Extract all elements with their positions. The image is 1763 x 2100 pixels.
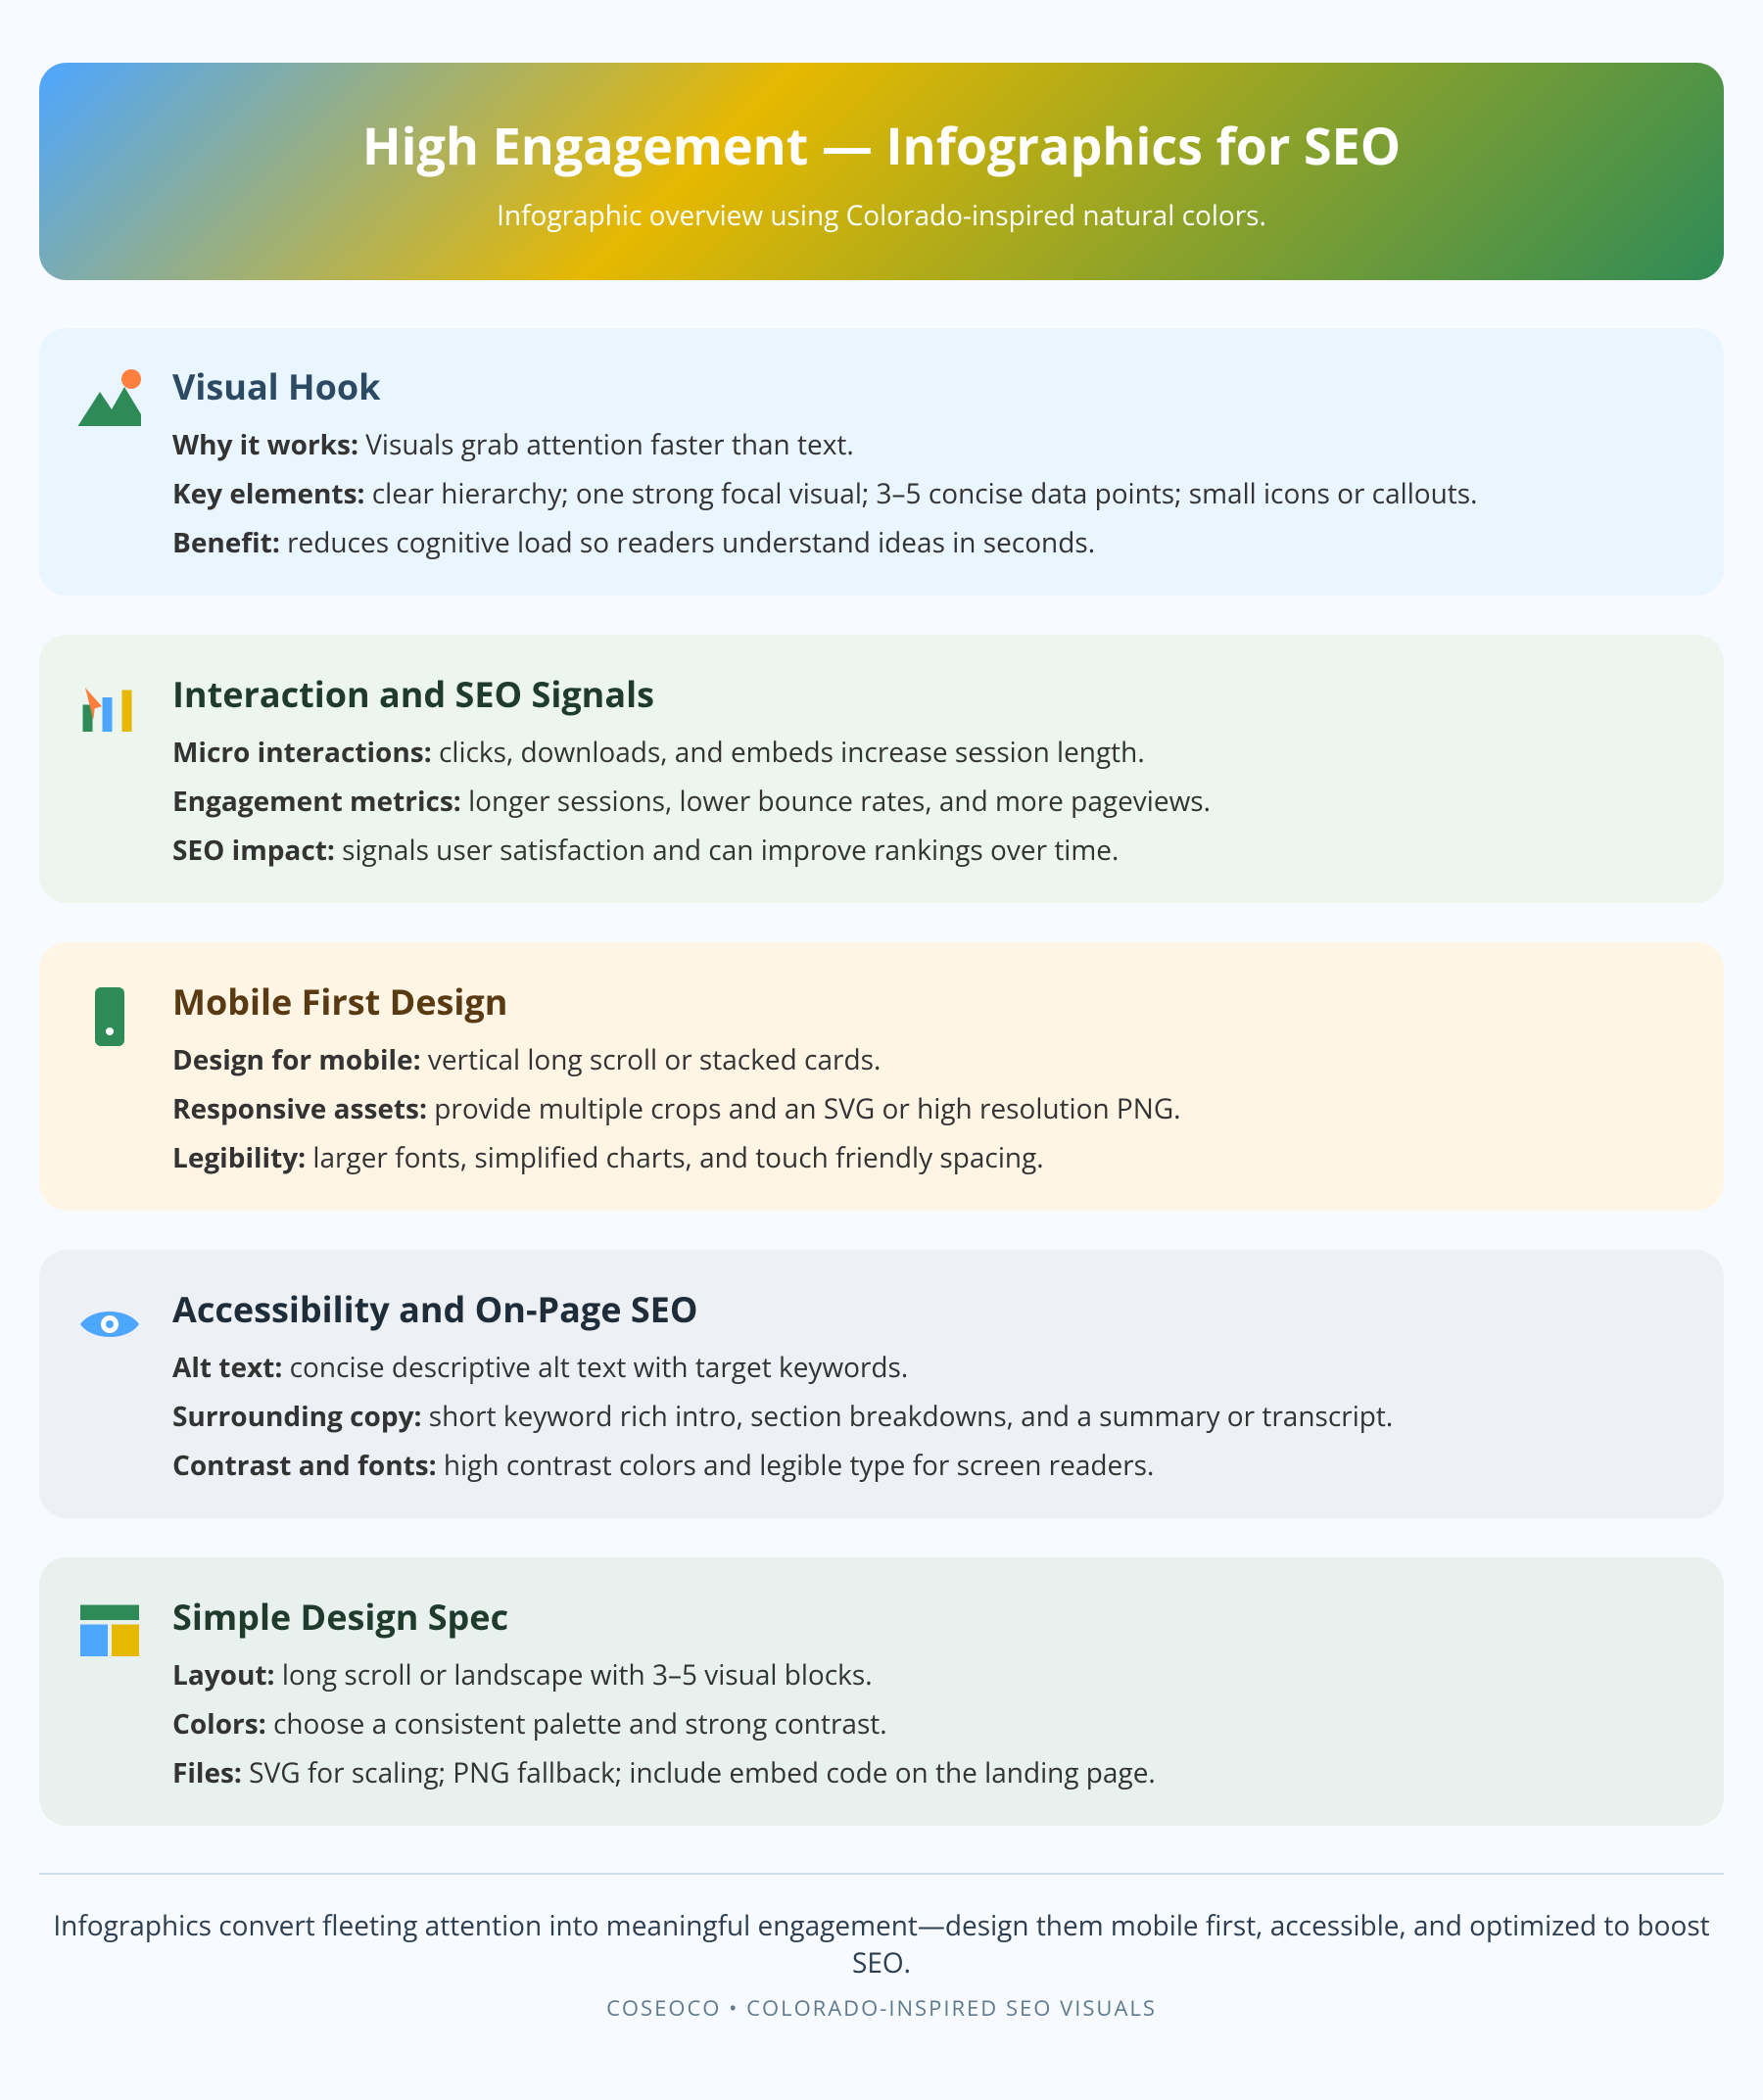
text: engagement metrics: Engagement metrics: longer sessions, lower bounce rates, and more pageviews. xyxy=(172,783,1211,820)
panel: simple design spec xyxy=(39,1557,1724,1826)
text: contrast and fonts: Contrast and fonts: high contrast colors and legible type for screen readers. xyxy=(172,1447,1154,1484)
text: SEO impact: SEO impact: signals user satisfaction and can improve rankings over time. xyxy=(172,832,1119,869)
icon: mountains and sun xyxy=(78,369,141,426)
closing statement: Infographics convert fleeting attention into meaningful engagement—design them mobile first, accessible, and optimized to boost SEO. xyxy=(53,1907,1710,1981)
text: alt text: Alt text: concise descriptive alt text with target keywords. xyxy=(172,1349,908,1386)
icon: bar chart with cursor xyxy=(82,688,131,732)
panel: visual hook xyxy=(39,328,1724,596)
text: colors: Colors: choose a consistent palette and strong contrast. xyxy=(172,1705,887,1742)
text: files: Files: SVG for scaling; PNG fallback; include embed code on the landing page. xyxy=(172,1754,1156,1791)
text: surrounding copy: Surrounding copy: short keyword rich intro, section breakdowns, and a summary or transcript. xyxy=(172,1398,1393,1435)
panel: interaction and SEO signals xyxy=(39,635,1724,903)
heading: simple design spec: Simple Design Spec xyxy=(172,1593,508,1641)
icon: eye xyxy=(80,1312,139,1337)
text: key elements: Key elements: clear hierarchy; one strong focal visual; 3–5 concise data points; small icons or callouts. xyxy=(172,475,1477,512)
text: benefit: Benefit: reduces cognitive load so readers understand ideas in seconds. xyxy=(172,524,1095,561)
panel: accessibility and on-page SEO xyxy=(39,1250,1724,1518)
text: layout: Layout: long scroll or landscape with 3–5 visual blocks. xyxy=(172,1656,873,1694)
panel: mobile first design xyxy=(39,942,1724,1211)
heading: accessibility and on-page SEO: Accessibility and On-Page SEO xyxy=(172,1285,697,1333)
title: High Engagement — Infographics for SEO xyxy=(362,111,1401,180)
heading: interaction and SEO signals: Interaction and SEO Signals xyxy=(172,670,654,718)
text: design for mobile: Design for mobile: vertical long scroll or stacked cards. xyxy=(172,1041,881,1078)
footer credit: COSEOCO • COLORADO-INSPIRED SEO VISUALS xyxy=(606,1993,1157,2023)
heading: mobile first design: Mobile First Design xyxy=(172,978,507,1026)
text: micro interactions: Micro interactions: clicks, downloads, and embeds increase session length. xyxy=(172,734,1145,771)
heading: visual hook: Visual Hook xyxy=(172,362,380,410)
icon: phone xyxy=(95,987,124,1046)
text: legibility: Legibility: larger fonts, simplified charts, and touch friendly spacing. xyxy=(172,1139,1044,1176)
text: why it works: Why it works: Visuals grab attention faster than text. xyxy=(172,426,854,463)
text: responsive assets: Responsive assets: provide multiple crops and an SVG or high resolution PNG. xyxy=(172,1090,1181,1127)
subtitle: Infographic overview using Colorado-inspired natural colors. xyxy=(497,197,1266,234)
header banner xyxy=(39,63,1724,280)
icon: layout blocks xyxy=(80,1604,139,1656)
